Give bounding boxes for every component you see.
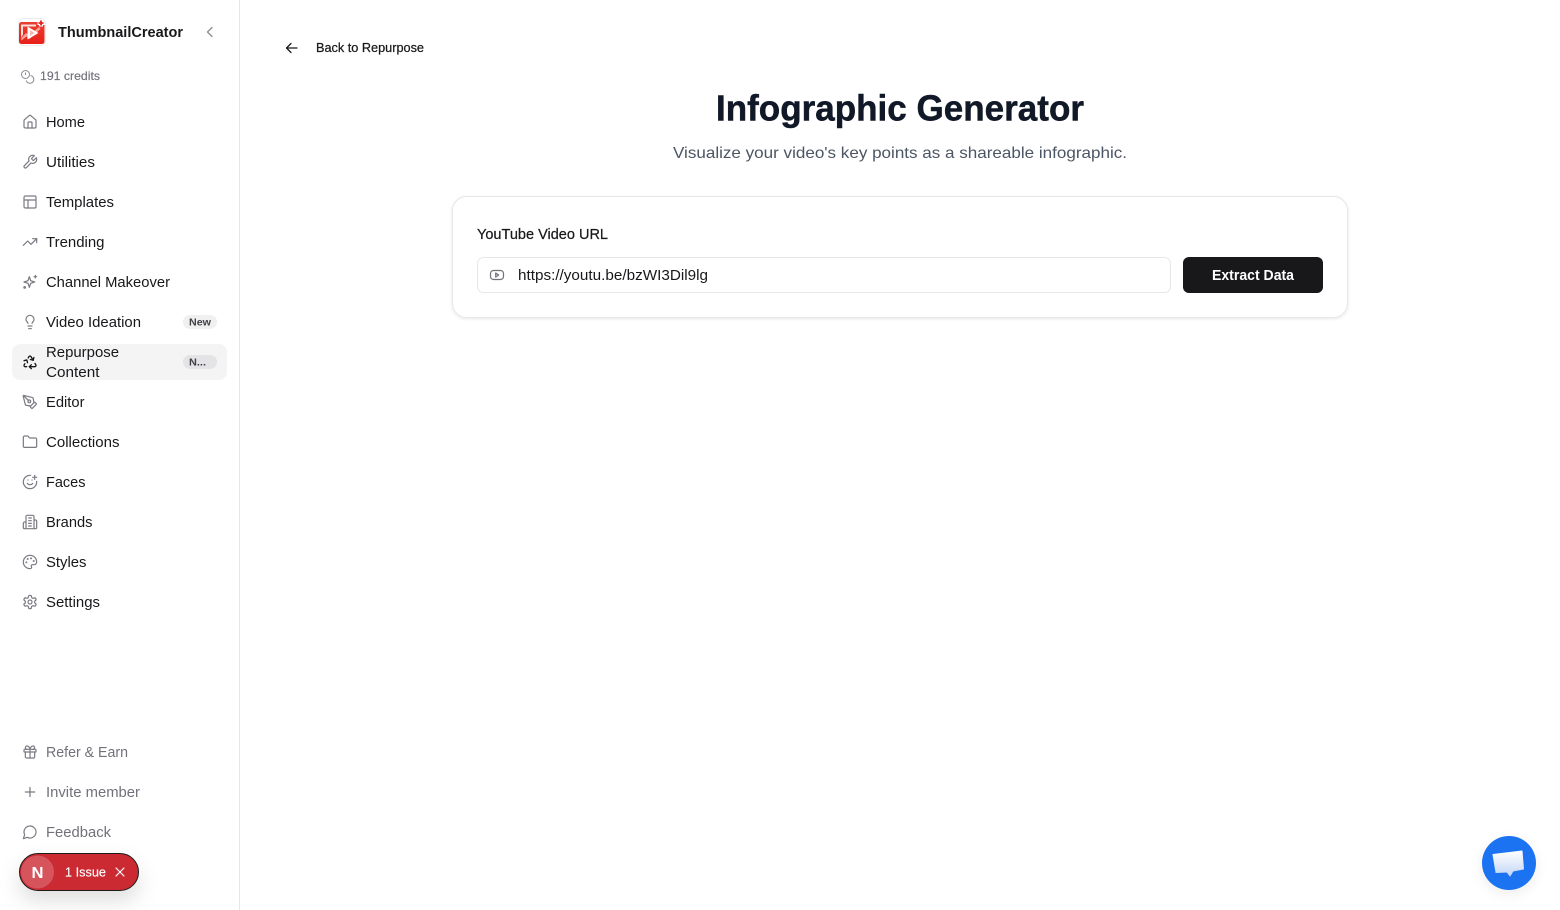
button: Extract Data [1183,257,1323,293]
chat widget button [1482,836,1536,890]
icon: ThumbnailCreator logo [18,18,46,46]
nav item: Collections: Collections [46,435,119,451]
nav item: Feedback: Feedback [46,825,112,841]
title: Infographic Generator [716,88,1084,128]
nav item: Refer & Earn: Refer & Earn [46,745,128,761]
nav item: Brands [23,515,92,531]
back link: Back to Repurpose [316,41,424,55]
nav item: Repurpose Content (active): Repurpose [46,345,119,361]
nav item: Styles: Styles [46,555,86,571]
nav item: Settings [24,595,100,611]
credits: 191 credits [40,69,100,83]
nav item: Invite member: Invite member [46,785,140,801]
nav item: Trending: Trending [46,235,104,251]
nav item: Channel Makeover: Channel Makeover [46,275,170,291]
issue badge: 1 Issue [65,866,106,880]
nav item: Repurpose Content (active) [12,344,227,381]
badge: New [183,315,217,329]
nav item: Templates: Templates [46,195,114,211]
issue badge: N [32,865,44,882]
nav item: Video Ideation: Video Ideation [46,315,141,331]
button: Extract Data: Extract Data [1212,268,1295,284]
nav item: Faces: Faces [46,475,86,491]
issue badge [20,854,138,890]
nav item: Editor: Editor [46,395,85,411]
subtitle: Visualize your video's key points as a shareable infographic. [673,145,1127,162]
brand name: ThumbnailCreator [58,25,183,41]
badge: N...: N... [189,358,206,368]
URL input [478,258,1170,292]
nav item: Video Ideation [26,315,217,331]
nav item: Settings: Settings [46,595,100,611]
nav item: Trending [23,235,104,251]
nav item: Repurpose Content (active): Content [46,365,100,381]
nav item: Utilities: Utilities [46,155,95,171]
badge: N... [183,355,217,369]
nav item: Brands: Brands [46,515,92,531]
badge: New: New [189,318,211,328]
nav item: Home: Home [46,115,85,131]
nav item: Editor [23,395,85,411]
field label: YouTube Video URL [477,227,608,243]
panel: sidebar [0,0,240,910]
panel: URL form card [452,196,1348,318]
nav item: Home [24,115,85,131]
nav item: Utilities [24,155,95,171]
nav item: Faces [23,475,86,491]
icon: collapse chevron [208,28,212,36]
URL input: https://youtu.be/bzWI3Dil9lg [518,268,708,284]
nav item: Styles [23,555,86,571]
icon: youtube [490,270,504,280]
